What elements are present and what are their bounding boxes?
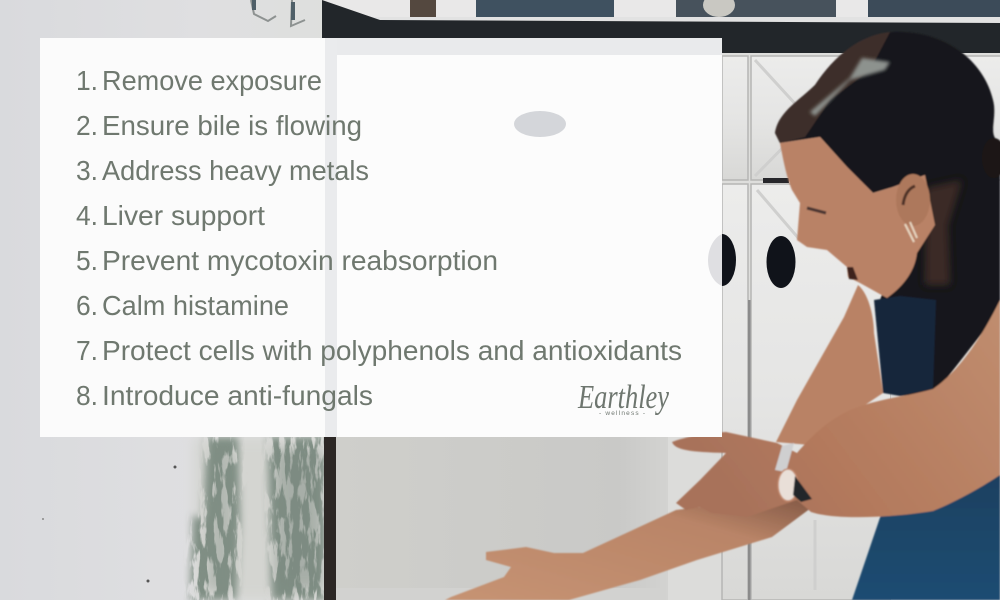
- wall corner edge: [324, 20, 336, 600]
- back arm: [776, 285, 883, 445]
- logo: Earthley wellness: - wellness -: [599, 410, 645, 417]
- blue top: [874, 296, 936, 396]
- step 7: 7.: [76, 335, 98, 366]
- ghost knob: [708, 234, 722, 286]
- wall: [0, 0, 330, 600]
- lower arm: [445, 495, 819, 600]
- bun: [982, 138, 1000, 178]
- step 4: Liver support: [102, 200, 265, 231]
- front arm and hand: [672, 300, 1000, 517]
- cabinet lower door: [336, 437, 748, 600]
- mouth: [847, 267, 858, 280]
- mold on wall: [190, 437, 325, 600]
- neck: [925, 180, 962, 285]
- watch: [775, 443, 812, 502]
- step 3: Address heavy metals: [102, 155, 369, 186]
- hair highlight: [810, 58, 890, 116]
- hair brown shading: [775, 32, 890, 143]
- step 7: Protect cells with polyphenols and antioxidants: [102, 335, 682, 366]
- step 2: 2.: [76, 110, 98, 141]
- denim lower: [852, 465, 1000, 600]
- step 6: 6.: [76, 290, 98, 321]
- list of steps: [76, 65, 682, 411]
- step 1: 1.: [76, 65, 98, 96]
- cabinet base: [336, 20, 1000, 600]
- cabinet doors right: [722, 56, 1000, 600]
- step 8: Introduce anti-fungals: [102, 380, 373, 411]
- step 5: Prevent mycotoxin reabsorption: [102, 245, 498, 276]
- hair and dark top: [775, 32, 1000, 396]
- earring: [905, 222, 917, 242]
- eye: [807, 208, 826, 213]
- wall stains: [42, 0, 305, 582]
- ghost handle: [514, 111, 566, 137]
- step 4: 4.: [76, 200, 98, 231]
- step 6: Calm histamine: [102, 290, 289, 321]
- cabinet knobs: [708, 234, 796, 288]
- step 3: 3.: [76, 155, 98, 186]
- logo: Earthley wellness: Earthley: [577, 379, 670, 416]
- translucent panel: [40, 38, 722, 437]
- woman figure: [445, 32, 1000, 600]
- ear: [896, 174, 930, 226]
- step 8: 8.: [76, 380, 98, 411]
- upper wall shelf and window strip: [322, 0, 1000, 53]
- step 1: Remove exposure: [102, 65, 322, 96]
- face: [780, 137, 935, 298]
- step 5: 5.: [76, 245, 98, 276]
- step 2: Ensure bile is flowing: [102, 110, 362, 141]
